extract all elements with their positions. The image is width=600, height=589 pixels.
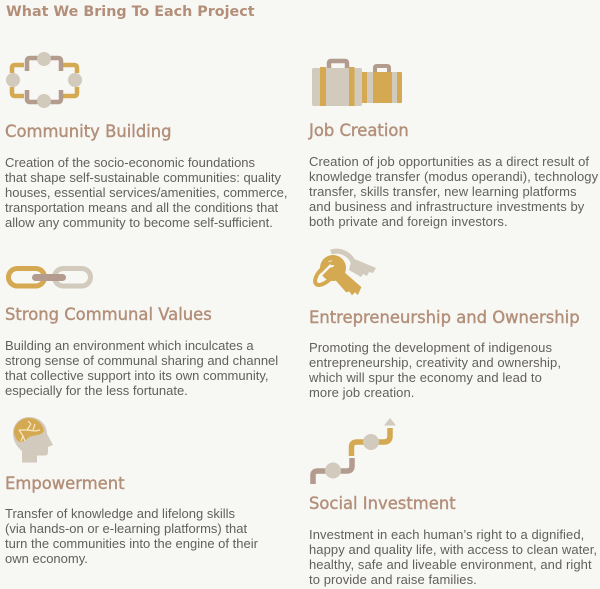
- text: social investment: [309, 527, 597, 587]
- text: community building: houses, essential services/amenities, commerce,: [5, 185, 288, 200]
- heading: strong communal values: Strong Communal Values: [5, 305, 212, 324]
- text: job creation: and business and infrastructure investments by: [309, 198, 584, 214]
- text: strong communal values: [5, 338, 278, 398]
- icon: chain links: [6, 266, 93, 288]
- title: What We Bring To Each Project: [6, 4, 255, 20]
- heading: community building: Community Building: [5, 122, 172, 141]
- heading: entrepreneurship and ownership: Entrepreneurship and Ownership: [309, 308, 580, 327]
- text: strong communal values: that collective support into its own community,: [5, 368, 268, 383]
- text: social investment: happy and quality life, with access to clean water,: [309, 542, 597, 557]
- text: strong communal values: especially for the less fortunate.: [5, 383, 188, 398]
- heading: empowerment: Empowerment: [5, 474, 125, 492]
- text: job creation: [309, 154, 598, 228]
- text: empowerment: [5, 506, 258, 566]
- text: community building: Creation of the socio-economic foundations: [5, 155, 255, 170]
- text: social investment: to provide and raise families.: [309, 572, 477, 587]
- text: community building: [5, 155, 288, 230]
- icon: rising path: [310, 418, 396, 484]
- text: entrepreneurship and ownership: entrepreneurship, creativity and ownership,: [309, 355, 561, 370]
- icon: keys: [313, 248, 376, 296]
- icon: suitcases: [312, 58, 402, 106]
- text: job creation: transfer, skills transfer, new learning platforms: [309, 184, 577, 198]
- text: social investment: healthy, safe and liveable environment, and right: [309, 557, 592, 572]
- text: empowerment: turn the communities into the engine of their: [5, 536, 258, 551]
- text: strong communal values: strong sense of communal sharing and channel: [5, 353, 278, 368]
- text: entrepreneurship and ownership: [309, 340, 561, 400]
- text: entrepreneurship and ownership: Promoting the development of indigenous: [309, 340, 552, 355]
- text: community building: allow any community to become self-sufficient.: [5, 215, 273, 230]
- text: empowerment: own economy.: [5, 551, 88, 566]
- text: job creation: Creation of job opportunities as a direct result of: [309, 154, 589, 168]
- text: job creation: knowledge transfer (modus operandi), technology: [309, 168, 598, 184]
- text: empowerment: Transfer of knowledge and lifelong skills: [5, 506, 235, 521]
- text: entrepreneurship and ownership: which will spur the economy and lead to: [309, 370, 542, 385]
- icon: community building: [6, 52, 82, 108]
- heading: social investment: Social Investment: [309, 494, 456, 513]
- text: entrepreneurship and ownership: more job creation.: [309, 385, 414, 400]
- text: job creation: both private and foreign investors.: [309, 214, 508, 228]
- text: social investment: Investment in each human’s right to a dignified,: [309, 527, 584, 542]
- icon: head with brain: [13, 417, 53, 462]
- text: community building: transportation means and all the conditions that: [5, 200, 278, 215]
- text: strong communal values: Building an environment which inculcates a: [5, 338, 254, 353]
- text: community building: that shape self-sustainable communities: quality: [5, 170, 281, 185]
- text: empowerment: (via hands-on or e-learning platforms) that: [5, 521, 247, 536]
- heading: job creation: Job Creation: [309, 120, 409, 140]
